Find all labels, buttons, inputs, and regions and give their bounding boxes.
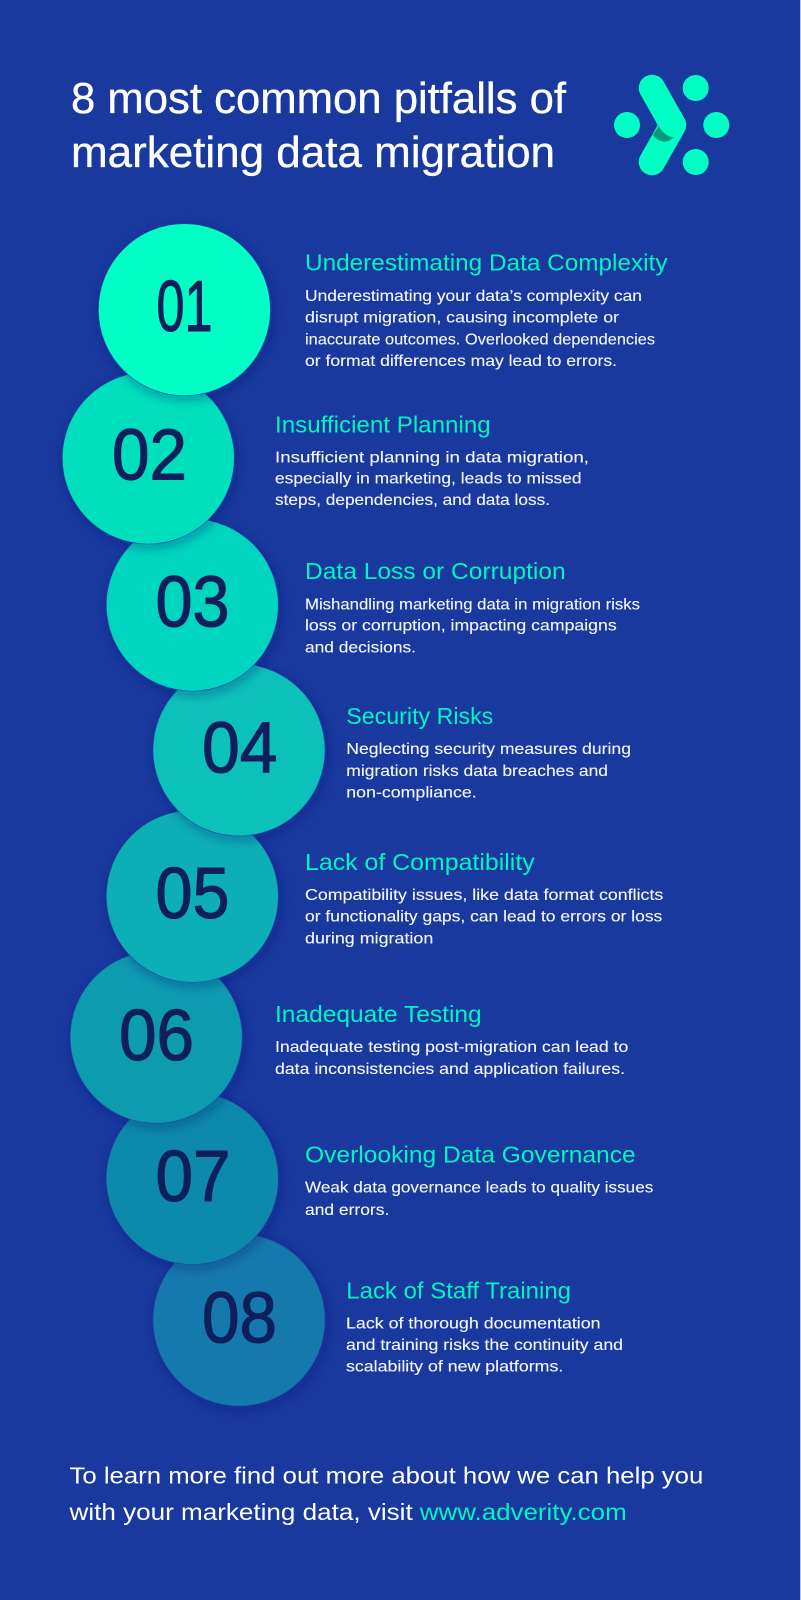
panel: item 4 text: Neglecting security measures during xyxy=(346,741,631,758)
panel: item 5 text: Lack of Compatibility xyxy=(305,849,535,875)
panel: item 2 text: especially in marketing, leads to missed xyxy=(275,470,582,487)
panel: item 8 text xyxy=(346,1278,623,1376)
panel: item 1 text: inaccurate outcomes. Overlooked dependencies xyxy=(305,331,655,348)
panel: item 3 text: loss or corruption, impacting campaigns xyxy=(305,618,617,635)
circle 04: 04 xyxy=(202,708,278,788)
panel: item 2 text xyxy=(275,411,589,509)
title: marketing data migration xyxy=(71,128,555,177)
panel: item 8 text: and training risks the continuity and xyxy=(346,1337,623,1354)
panel: item 8 text: scalability of new platforms. xyxy=(346,1359,563,1376)
footer call to action xyxy=(68,1462,703,1525)
panel: item 7 text: Overlooking Data Governance xyxy=(305,1142,636,1168)
footer call to action: with your marketing data, visit xyxy=(68,1499,413,1525)
panel: item 6 text: data inconsistencies and application failures. xyxy=(275,1061,625,1078)
panel: item 2 text: steps, dependencies, and data loss. xyxy=(275,492,550,509)
footer call to action: www.adverity.com xyxy=(419,1499,627,1525)
footer call to action: To learn more find out more about how we can help you xyxy=(70,1462,703,1488)
panel: item 6 text xyxy=(275,1001,628,1078)
panel: item 1 text: or format differences may lead to errors. xyxy=(305,353,617,370)
panel: item 2 text: Insufficient Planning xyxy=(275,411,491,437)
circle 07: 07 xyxy=(156,1137,230,1217)
title: 8 most common pitfalls of xyxy=(71,74,567,123)
panel: item 1 text: Underestimating your data’s complexity can xyxy=(305,288,642,305)
panel: item 7 text xyxy=(305,1142,653,1219)
panel: item 6 text: Inadequate testing post-migration can lead to xyxy=(275,1039,628,1056)
panel: item 7 text: Weak data governance leads to quality issues xyxy=(305,1180,653,1197)
panel: item 5 text xyxy=(305,849,663,947)
panel: item 3 text: and decisions. xyxy=(305,639,416,656)
circle 01: 01 xyxy=(156,267,212,347)
circle 03: 03 xyxy=(156,562,230,642)
circle 02: 02 xyxy=(112,416,187,496)
circle 07 xyxy=(106,1092,278,1264)
panel: item 3 text: Data Loss or Corruption xyxy=(305,558,566,584)
panel: item 4 text xyxy=(346,703,631,801)
circle 02 xyxy=(62,372,234,544)
panel: item 5 text: Compatibility issues, like data format conflicts xyxy=(305,887,663,904)
panel: item 1 text xyxy=(305,250,668,370)
icon: adverity logo xyxy=(614,75,729,175)
panel: item 2 text: Insufficient planning in data migration, xyxy=(275,449,589,466)
panel: item 8 text: Lack of Staff Training xyxy=(346,1278,571,1304)
panel: item 5 text: or functionality gaps, can lead to errors or loss xyxy=(305,909,662,926)
circle 05: 05 xyxy=(156,854,230,934)
panel: item 7 text: and errors. xyxy=(305,1202,389,1219)
panel: item 3 text: Mishandling marketing data in migration risks xyxy=(305,596,640,613)
panel: item 1 text: disrupt migration, causing incomplete or xyxy=(305,310,620,327)
panel: item 8 text: Lack of thorough documentation xyxy=(346,1315,601,1332)
panel: item 4 text: non-compliance. xyxy=(346,784,477,801)
panel: item 1 text: Underestimating Data Complexity xyxy=(305,250,668,276)
circle 01 xyxy=(98,224,270,396)
panel: item 3 text xyxy=(305,558,640,656)
title xyxy=(71,74,567,177)
panel: item 4 text: Security Risks xyxy=(346,703,493,729)
circle 08 xyxy=(153,1234,325,1406)
circle 06: 06 xyxy=(119,996,194,1076)
panel: item 5 text: during migration xyxy=(305,930,433,947)
panel: item 6 text: Inadequate Testing xyxy=(275,1001,482,1027)
circle 05 xyxy=(106,810,278,982)
circle 06 xyxy=(70,951,242,1123)
circle 08: 08 xyxy=(202,1278,277,1358)
panel: item 4 text: migration risks data breaches and xyxy=(346,763,608,780)
circle 04 xyxy=(153,664,325,836)
circle 03 xyxy=(106,519,278,691)
